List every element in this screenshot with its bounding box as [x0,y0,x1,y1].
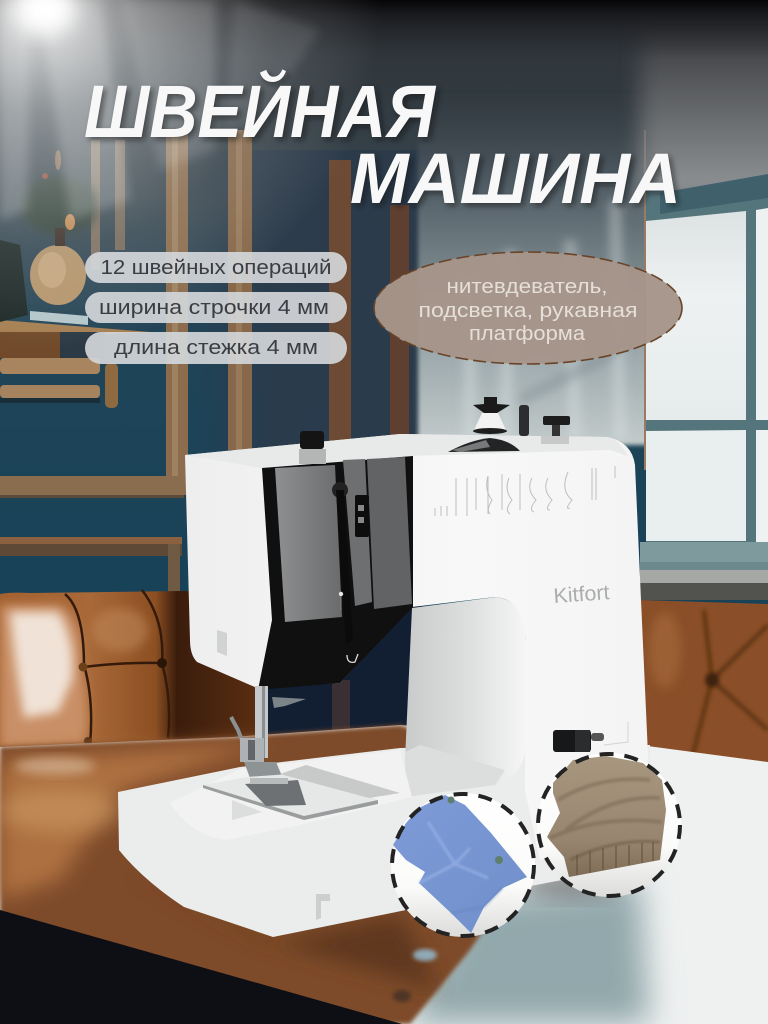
feature ellipse callout [374,252,682,364]
pill: stitch width [85,292,347,323]
bobbin winder and dial [448,397,570,452]
sample: blue shirt circle [391,793,535,937]
sun rays [0,0,768,400]
arm opening interior [405,597,526,795]
bottom slot [316,894,330,920]
title: ШВЕЙНАЯ [87,72,440,156]
table [0,725,768,1024]
wall panel frames and wooden posts [0,130,409,592]
feature ellipse callout: нитевдеватель, [446,276,608,298]
needle plate top of base [170,750,412,840]
top spool pin knob [299,431,326,464]
left small latch [217,630,227,656]
feature ellipse callout: подсветка, рукавная [418,300,638,322]
blue shirt cuff fabric [393,795,527,933]
dark opening behind machine arm [262,605,422,740]
title: ШВЕЙНАЯ [84,69,437,153]
pill: stitch length [85,332,347,364]
feature ellipse callout: платформа [469,323,586,345]
sample: beige elastic fabric circle [537,753,681,897]
sewing machine [118,397,652,937]
pill: stitch length: длина стежка 4 мм [114,337,318,359]
side switch [553,722,628,752]
pill: operations [85,252,347,283]
top surface [185,434,628,468]
title: МАШИНА [353,143,684,222]
shelf with vase and plant [0,150,150,408]
title [84,69,684,222]
stitch pattern chart [435,466,615,516]
pill: operations: 12 швейных операций [100,257,332,279]
pill: stitch width: ширина строчки 4 мм [99,297,329,319]
brand logo: Kitfort [553,581,610,608]
spec pills [85,252,347,364]
black front panel [258,456,413,690]
needle and presser foot [231,686,306,778]
title: МАШИНА [350,140,681,219]
window [640,174,768,600]
needle plate [203,765,400,820]
sofa right [640,600,768,762]
beige gathered fabric [547,756,666,877]
machine body [185,434,650,860]
sofa left [0,590,268,748]
machine base [118,745,652,937]
curtain [418,0,768,470]
